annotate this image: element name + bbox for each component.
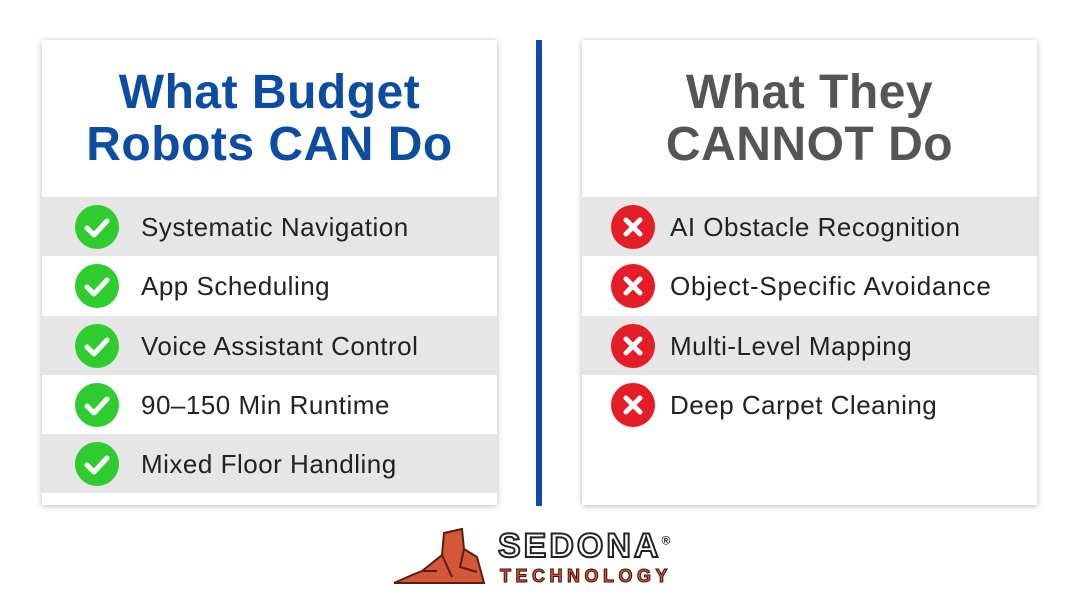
- heading: cannot do: What They: [686, 66, 933, 119]
- item: app scheduling: [75, 264, 330, 308]
- heading: can do: What Budget: [119, 66, 420, 119]
- item: runtime: [75, 383, 390, 427]
- item: ai obstacle: AI Obstacle Recognition: [670, 212, 960, 242]
- logo: [394, 527, 673, 586]
- item: mixed floor: Mixed Floor Handling: [141, 449, 397, 479]
- item: ai obstacle: [582, 197, 1037, 256]
- item: systematic navigation: [42, 197, 497, 256]
- item: systematic navigation: Systematic Navigation: [141, 212, 409, 242]
- panel: can do: [42, 40, 497, 505]
- item: object avoidance: Object-Specific Avoidance: [670, 271, 992, 301]
- text: technology: TECHNOLOGY: [500, 566, 672, 586]
- heading: cannot do: [666, 66, 953, 171]
- item: mixed floor: [42, 434, 497, 493]
- divider: [536, 40, 542, 506]
- heading: cannot do: CANNOT Do: [666, 118, 953, 171]
- item: voice assistant: [42, 316, 497, 375]
- item: deep carpet: [611, 383, 937, 427]
- item: multi-level: Multi-Level Mapping: [670, 331, 912, 361]
- icon: mountain: [394, 528, 486, 584]
- item: multi-level: [582, 316, 1037, 375]
- item: object avoidance: [611, 264, 992, 308]
- heading: can do: Robots CAN Do: [86, 118, 453, 171]
- heading: can do: [86, 66, 453, 171]
- panel: cannot do: [582, 40, 1037, 505]
- item: app scheduling: App Scheduling: [141, 271, 330, 301]
- item: voice assistant: Voice Assistant Control: [141, 331, 418, 361]
- item: runtime: 90–150 Min Runtime: [141, 390, 390, 420]
- text: sedona: SEDONA®: [498, 527, 673, 565]
- item: deep carpet: Deep Carpet Cleaning: [670, 390, 937, 420]
